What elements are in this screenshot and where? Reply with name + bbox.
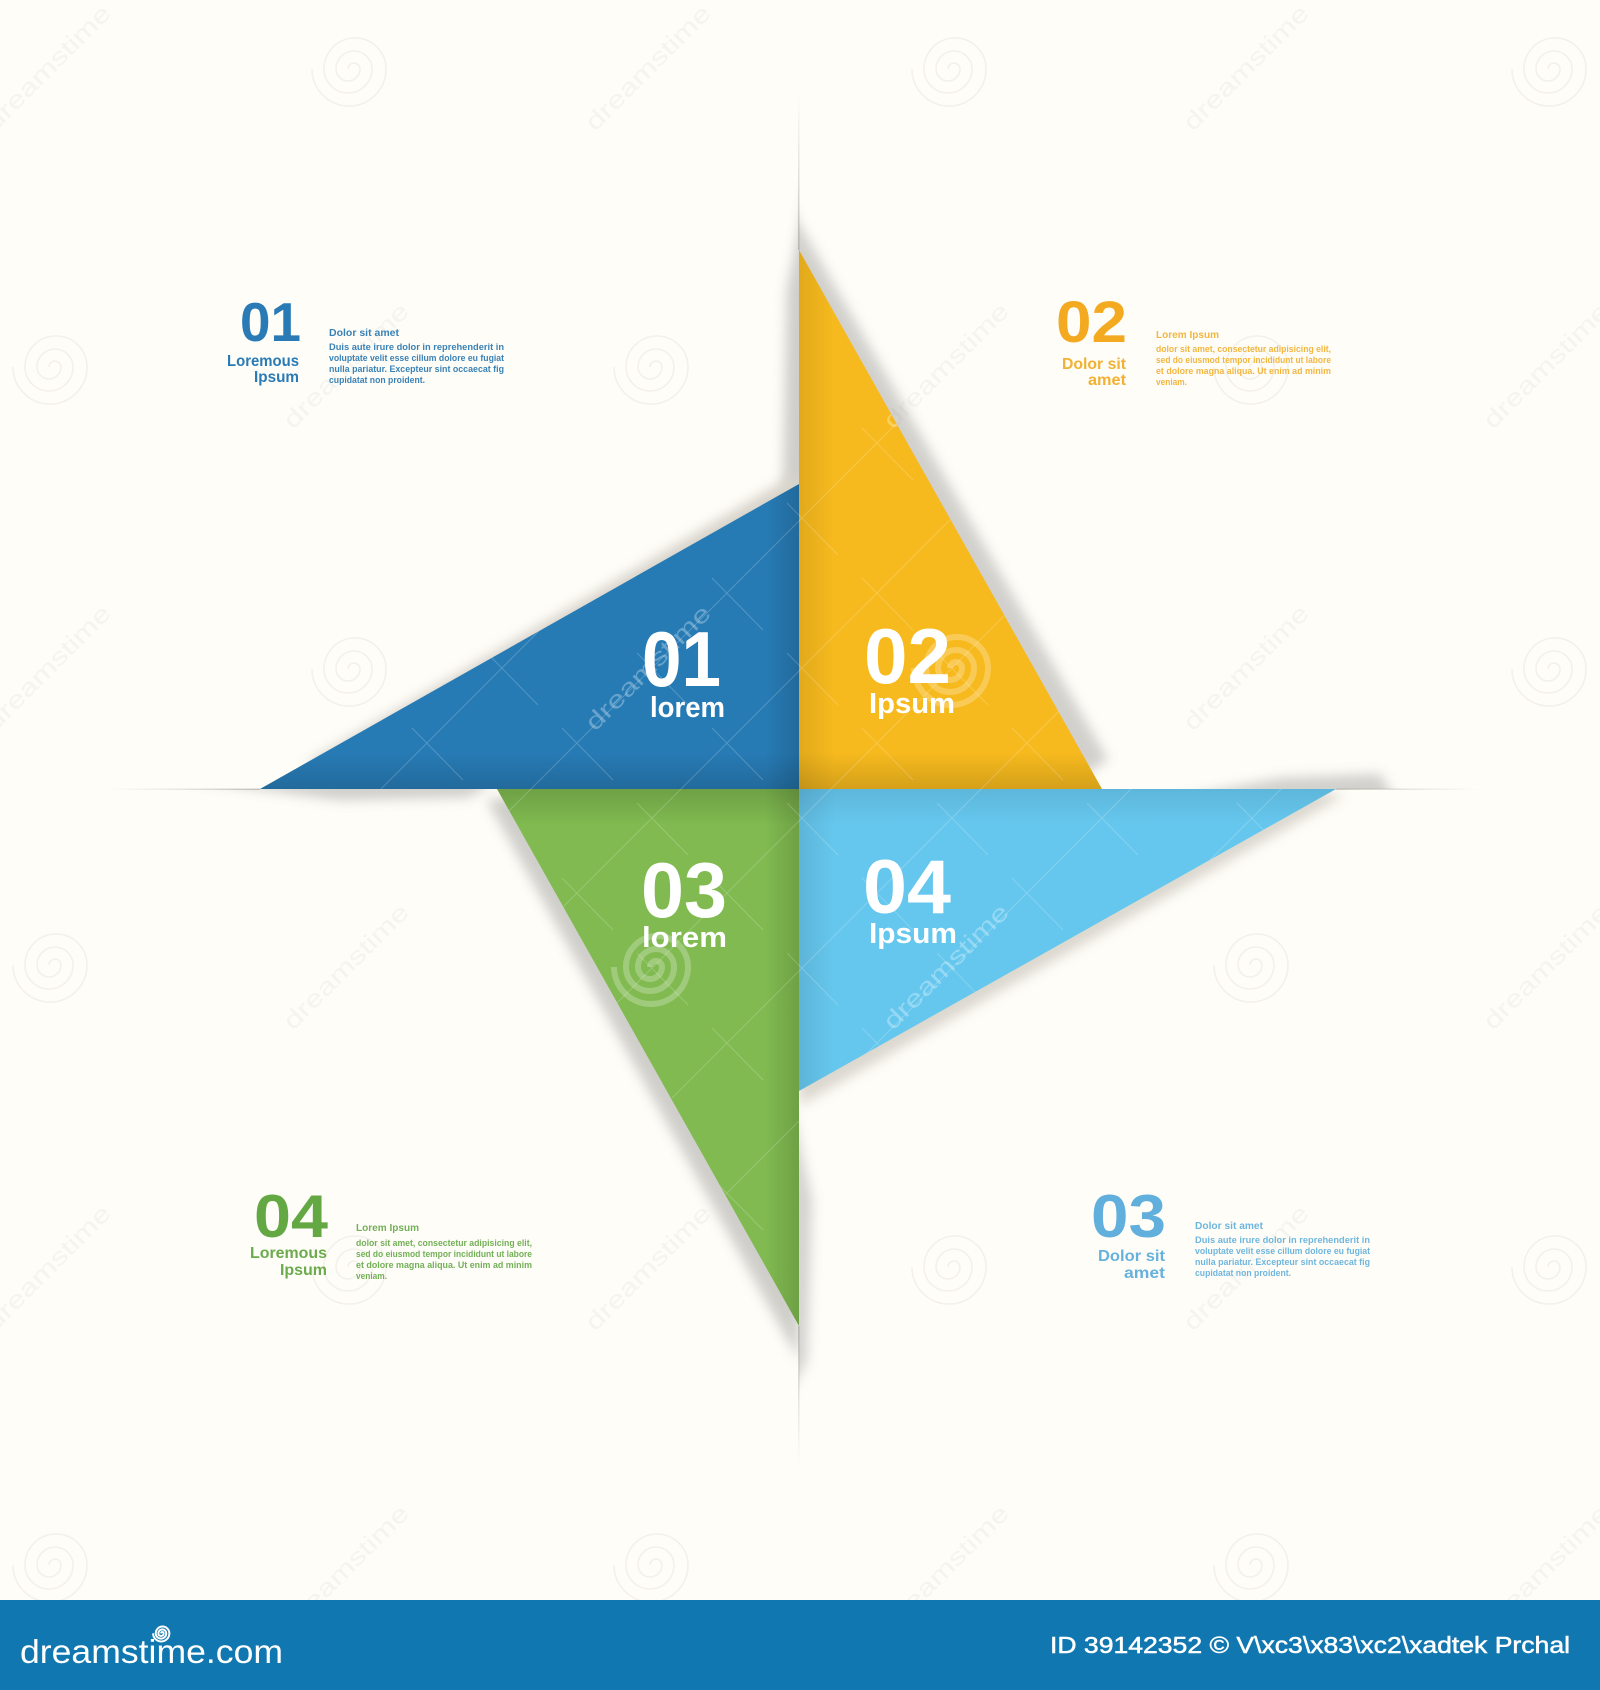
text block 03: [1091, 1183, 1371, 1282]
callout: 04 centre label: Ipsum: [869, 918, 957, 950]
description: veniam.: [356, 1271, 387, 1282]
label: [227, 353, 299, 386]
description: et dolore magna aliqua. Ut enim ad minim: [1156, 366, 1331, 377]
watermark pattern: dreamstime wordmarks: dreamstime: [878, 298, 1015, 434]
description: dolor sit amet, consectetur adipisicing elit,: [356, 1238, 532, 1249]
watermark pattern: dreamstime wordmarks: dreamstime: [580, 1200, 717, 1336]
watermark pattern: dreamstime wordmarks: dreamstime: [278, 1500, 415, 1636]
description: [329, 327, 505, 386]
panel: light blue triangle 04: [799, 789, 1336, 1091]
label: amet: [1088, 372, 1127, 389]
footer logo: dreamstime.com: [20, 1633, 283, 1670]
label: Dolor sit: [1062, 356, 1127, 373]
callout: 01 centre label: 01: [642, 615, 721, 703]
description: Lorem Ipsum: [1156, 329, 1219, 341]
description: sed do eiusmod tempor incididunt ut labore: [356, 1249, 532, 1260]
description: cupidatat non proident.: [329, 375, 425, 386]
watermark pattern: dreamstime wordmarks: dreamstime: [580, 0, 717, 136]
label: amet: [1124, 1265, 1166, 1282]
text block 02: [1056, 290, 1331, 389]
watermark pattern: dreamstime wordmarks: dreamstime: [1478, 899, 1600, 1035]
callout: 03 centre label: lorem: [642, 922, 727, 954]
callout: 04 centre label: 04: [863, 845, 951, 930]
panel: green triangle 03: [497, 789, 799, 1326]
watermark overlay on coloured shapes: dreamstime: [878, 298, 1015, 434]
label: [1062, 356, 1127, 389]
number 01: 01: [240, 291, 301, 353]
panel: blue triangle 01: [260, 484, 799, 789]
callout: 03 centre label: 03: [641, 846, 727, 934]
description: nulla pariatur. Excepteur sint occaecat fig: [329, 364, 504, 375]
text block 04: [250, 1183, 532, 1282]
watermark overlay on coloured shapes: dreamstime: [878, 899, 1015, 1035]
label: Ipsum: [280, 1262, 327, 1279]
callout: 01 centre label: lorem: [650, 692, 725, 724]
footer bar: [0, 1600, 1600, 1690]
label: [250, 1245, 327, 1279]
number 03: 03: [1091, 1183, 1166, 1250]
description: [1156, 329, 1331, 388]
number 02: 02: [1056, 290, 1127, 355]
callout: 02 centre label: 02: [864, 612, 951, 700]
label: [1098, 1248, 1166, 1282]
description: sed do eiusmod tempor incididunt ut labore: [1156, 355, 1331, 366]
watermark pattern: dreamstime wordmarks: dreamstime: [1478, 298, 1600, 434]
watermark pattern: dreamstime wordmarks: dreamstime: [278, 298, 415, 434]
label: Loremous: [250, 1245, 327, 1262]
description: nulla pariatur. Excepteur sint occaecat fig: [1195, 1257, 1370, 1268]
number 04: 04: [254, 1183, 329, 1250]
description: Lorem Ipsum: [356, 1222, 419, 1234]
watermark pattern: dreamstime wordmarks: dreamstime: [1178, 600, 1315, 736]
description: voluptate velit esse cillum dolore eu fugiat: [329, 353, 505, 364]
footer credit: ID 39142352 © V\xc3\x83\xc2\xadtek Prchal: [1050, 1632, 1570, 1658]
description: Dolor sit amet: [1195, 1220, 1263, 1232]
description: voluptate velit esse cillum dolore eu fugiat: [1195, 1246, 1371, 1257]
description: et dolore magna aliqua. Ut enim ad minim: [356, 1260, 532, 1271]
paper-cut slits and drop shadows: [110, 95, 1480, 1465]
label: Dolor sit: [1098, 1248, 1166, 1265]
callout: 02 centre label: Ipsum: [869, 688, 955, 720]
watermark pattern: dreamstime wordmarks: dreamstime: [1478, 1500, 1600, 1636]
label: Loremous: [227, 353, 299, 370]
watermark pattern: dreamstime wordmarks: dreamstime: [878, 1500, 1015, 1636]
watermark pattern: dreamstime wordmarks: dreamstime: [1178, 1200, 1315, 1336]
panel: yellow triangle 02: [799, 250, 1102, 789]
text block 01: [227, 291, 505, 386]
label: Ipsum: [254, 369, 299, 386]
description: [356, 1222, 532, 1282]
watermark overlay on coloured shapes: dreamstime: [580, 600, 717, 736]
description: [1195, 1220, 1371, 1279]
description: Duis aute irure dolor in reprehenderit in: [329, 342, 504, 353]
description: Duis aute irure dolor in reprehenderit in: [1195, 1235, 1370, 1246]
description: cupidatat non proident.: [1195, 1268, 1291, 1279]
description: veniam.: [1156, 377, 1187, 388]
description: dolor sit amet, consectetur adipisicing elit,: [1156, 344, 1331, 355]
watermark overlay on coloured shapes: [380, 414, 1282, 1230]
description: Dolor sit amet: [329, 327, 400, 339]
watermark pattern: dreamstime wordmarks: dreamstime: [278, 899, 415, 1035]
watermark pattern: dreamstime wordmarks: dreamstime: [1178, 0, 1315, 136]
